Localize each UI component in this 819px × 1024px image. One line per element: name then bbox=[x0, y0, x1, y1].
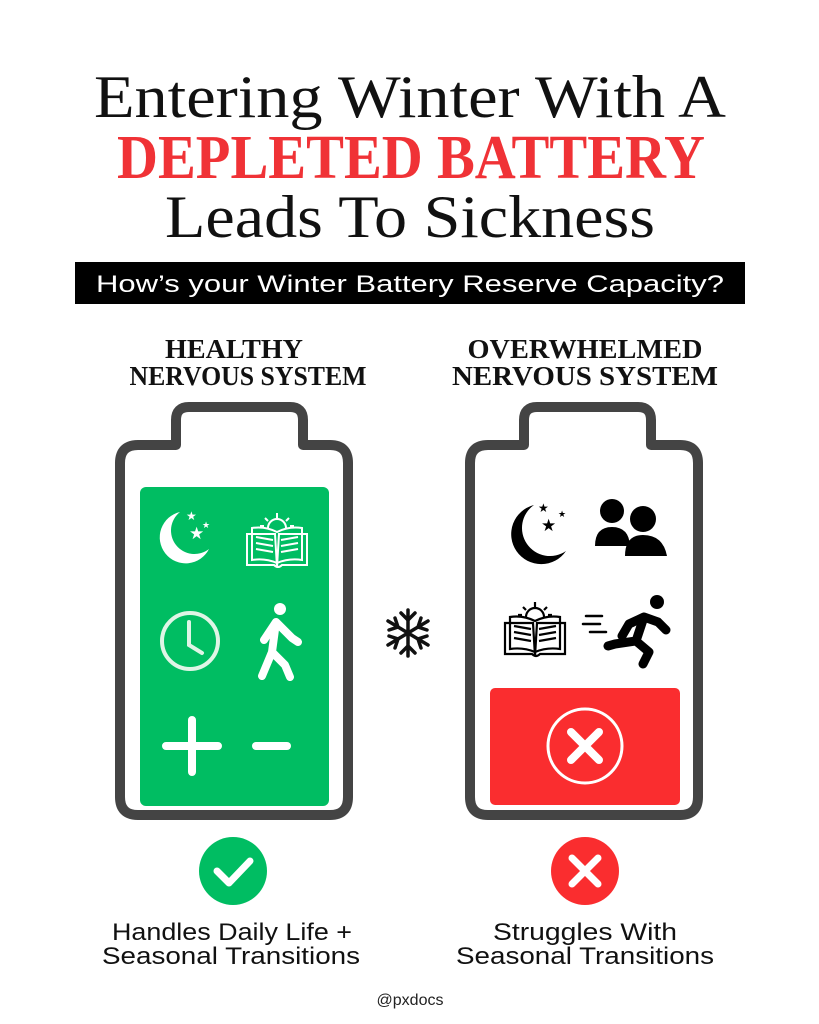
green fill bbox=[140, 487, 329, 806]
caption: healthy: Seasonal Transitions bbox=[102, 943, 360, 970]
subtitle bar: How’s your Winter Battery Reserve Capacity? bbox=[96, 271, 724, 298]
caption: healthy bbox=[102, 919, 360, 970]
heading: overwhelmed: NERVOUS SYSTEM bbox=[452, 361, 718, 391]
icon: people bbox=[595, 499, 667, 556]
title: Entering Winter With A bbox=[94, 64, 726, 130]
caption: overwhelmed: Seasonal Transitions bbox=[456, 943, 714, 970]
icon: moon dark: ★ bbox=[558, 509, 566, 519]
icon: moon dark: ★ bbox=[538, 501, 549, 515]
title bbox=[94, 64, 726, 250]
title: Leads To Sickness bbox=[165, 184, 655, 250]
battery: overwhelmed bbox=[470, 407, 698, 815]
icon: x badge bbox=[551, 837, 619, 905]
icon: minus bbox=[256, 742, 287, 750]
title: DEPLETED BATTERY bbox=[117, 124, 705, 192]
icon: book dark bbox=[505, 602, 565, 656]
icon: running person bbox=[583, 595, 666, 664]
icon: book bbox=[247, 513, 307, 567]
heading: overwhelmed: OVERWHELMED bbox=[468, 334, 702, 364]
icon: snowflake bbox=[388, 610, 428, 656]
icon: moon dark bbox=[511, 501, 566, 564]
icon: moon: ★ bbox=[189, 524, 204, 543]
icon: walking person bbox=[262, 603, 298, 677]
subtitle bar bbox=[75, 262, 745, 304]
icon: x circle bbox=[548, 709, 622, 783]
icon: clock bbox=[162, 613, 218, 669]
icon: moon: ★ bbox=[186, 509, 197, 523]
caption: overwhelmed: Struggles With bbox=[493, 919, 677, 946]
icon: moon: ★ bbox=[202, 520, 210, 530]
footer handle: @pxdocs bbox=[377, 992, 443, 1009]
heading: overwhelmed bbox=[452, 334, 718, 391]
caption: overwhelmed bbox=[456, 919, 714, 970]
heading: healthy: HEALTHY bbox=[165, 334, 303, 364]
icon: check badge bbox=[199, 837, 267, 905]
heading: healthy bbox=[130, 334, 366, 391]
icon: moon bbox=[160, 509, 210, 563]
red fill bbox=[490, 688, 680, 805]
icon: plus bbox=[166, 720, 218, 772]
caption: healthy: Handles Daily Life + bbox=[112, 919, 352, 946]
heading: healthy: NERVOUS SYSTEM bbox=[130, 361, 366, 391]
battery: healthy bbox=[120, 407, 348, 815]
icon: moon dark: ★ bbox=[541, 516, 556, 535]
